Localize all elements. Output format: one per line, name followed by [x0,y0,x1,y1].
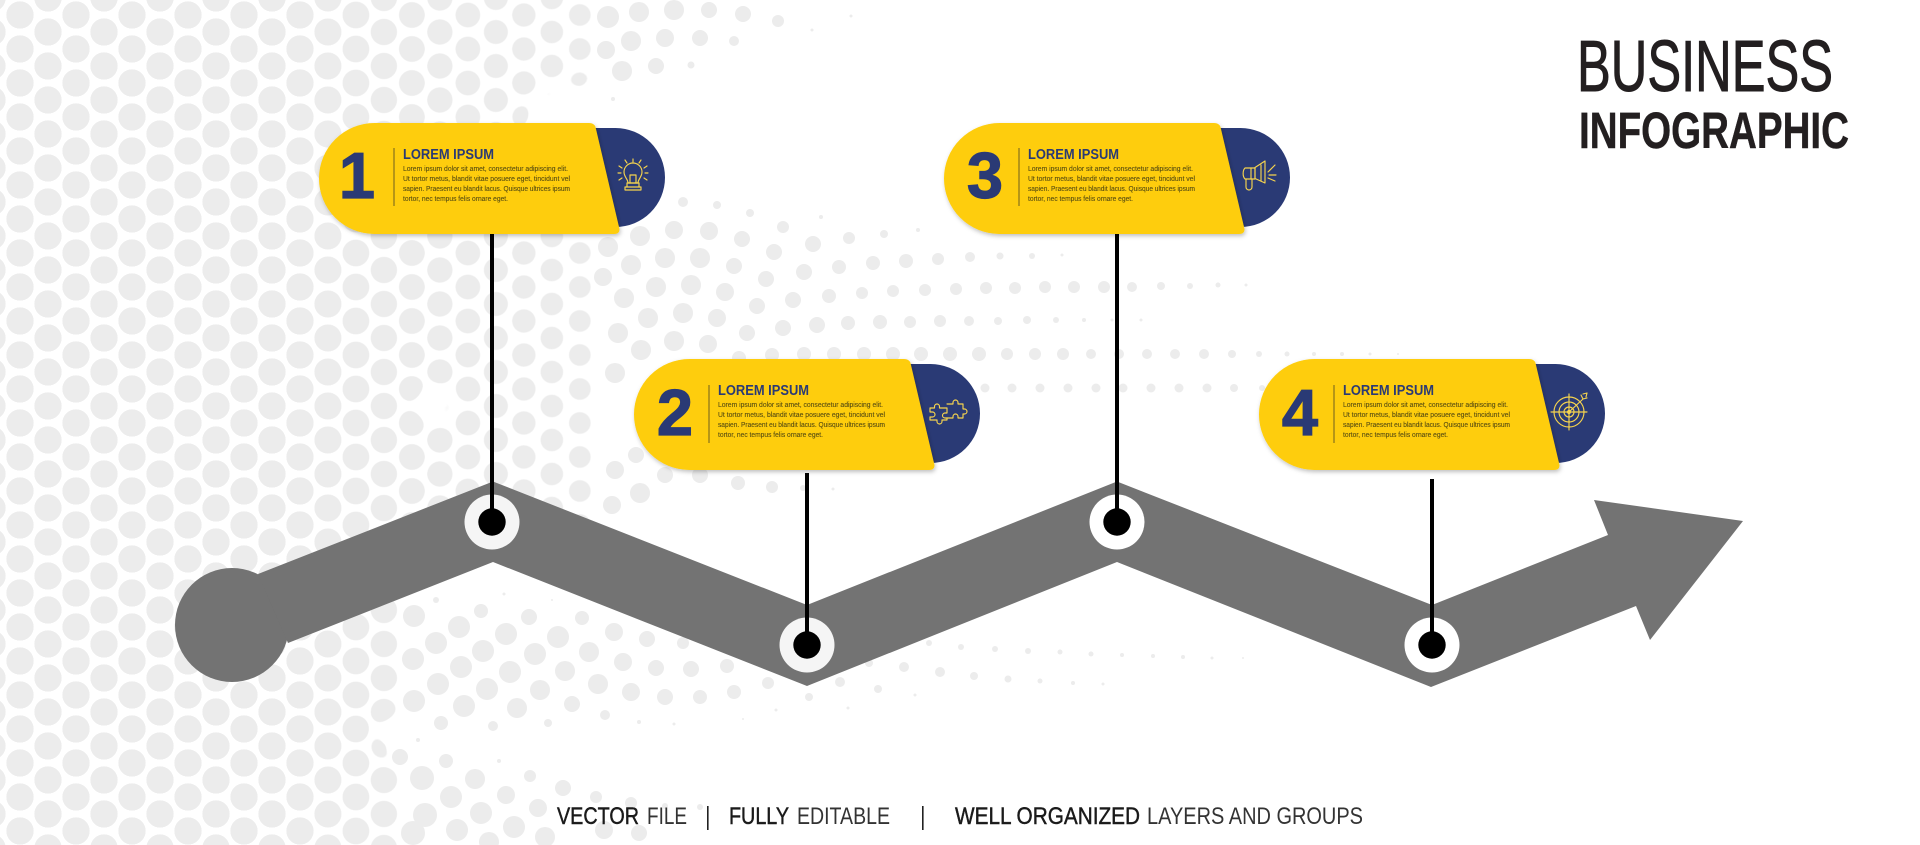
step 2 body text: sapien. Praesent eu blandit lacus. Quisque ultrices ipsum [718,420,885,429]
step number 4: 4 [1282,376,1318,449]
halftone dot background [0,0,1399,845]
step number 1: 1 [339,139,375,212]
step 4 body text [1343,400,1510,439]
step 3 body text: Ut tortor metus, blandit vitae posuere eget, tincidunt vel [1028,174,1195,183]
step 3 body text: sapien. Praesent eu blandit lacus. Quisque ultrices ipsum [1028,184,1195,193]
step 4 body text: tortor, nec tempus felis ornare eget. [1343,430,1448,439]
connector stem 4 [1430,479,1434,645]
step 2 body text: Ut tortor metus, blandit vitae posuere eget, tincidunt vel [718,410,885,419]
node 3 [1090,494,1144,550]
step 3 body text: tortor, nec tempus felis ornare eget. [1028,194,1133,203]
zigzag arrow path [175,482,1743,687]
node 1 [464,494,520,550]
node 2 [780,617,834,672]
step 2 heading: LOREM IPSUM [718,383,809,399]
footer tagline: FILE [647,803,687,830]
icon: puzzle [930,400,967,424]
panel: step 3 [944,123,1290,234]
step 4 body text: Ut tortor metus, blandit vitae posuere eget, tincidunt vel [1343,410,1510,419]
step number 2: 2 [657,376,693,449]
step 3 heading: LOREM IPSUM [1028,147,1119,163]
footer tagline: LAYERS AND GROUPS [1147,803,1363,830]
step 4 heading: LOREM IPSUM [1343,383,1434,399]
panel: step 4 [1259,359,1605,470]
connector stem 1 [490,234,494,522]
title [1577,27,1849,159]
connector stem 2 [805,473,809,645]
step 3 body text: Lorem ipsum dolor sit amet, consectetur adipiscing elit. [1028,164,1193,173]
footer tagline: VECTOR [557,803,639,830]
step 4 body text: sapien. Praesent eu blandit lacus. Quisque ultrices ipsum [1343,420,1510,429]
step 1 body text: tortor, nec tempus felis ornare eget. [403,194,508,203]
step 1 body text: sapien. Praesent eu blandit lacus. Quisque ultrices ipsum [403,184,570,193]
step 3 body text [1028,164,1195,203]
connector stem 3 [1115,234,1119,522]
icon: light bulb [618,159,648,190]
panel: step 2 [634,359,980,470]
step 4 body text: Lorem ipsum dolor sit amet, consectetur adipiscing elit. [1343,400,1508,409]
footer tagline [557,803,1363,830]
step 2 body text: tortor, nec tempus felis ornare eget. [718,430,823,439]
icon: target [1551,393,1587,430]
step 2 body text [718,400,885,439]
panel: step 1 [319,123,665,234]
footer tagline: FULLY [729,803,789,830]
footer tagline: WELL ORGANIZED [955,803,1140,830]
step 2 body text: Lorem ipsum dolor sit amet, consectetur adipiscing elit. [718,400,883,409]
step 1 heading: LOREM IPSUM [403,147,494,163]
icon: megaphone [1243,161,1276,190]
step number 3: 3 [967,139,1003,212]
footer tagline: EDITABLE [797,803,890,830]
node 4 [1404,617,1460,672]
step 1 body text: Ut tortor metus, blandit vitae posuere eget, tincidunt vel [403,174,570,183]
step 1 body text [403,164,570,203]
step 1 body text: Lorem ipsum dolor sit amet, consectetur adipiscing elit. [403,164,568,173]
